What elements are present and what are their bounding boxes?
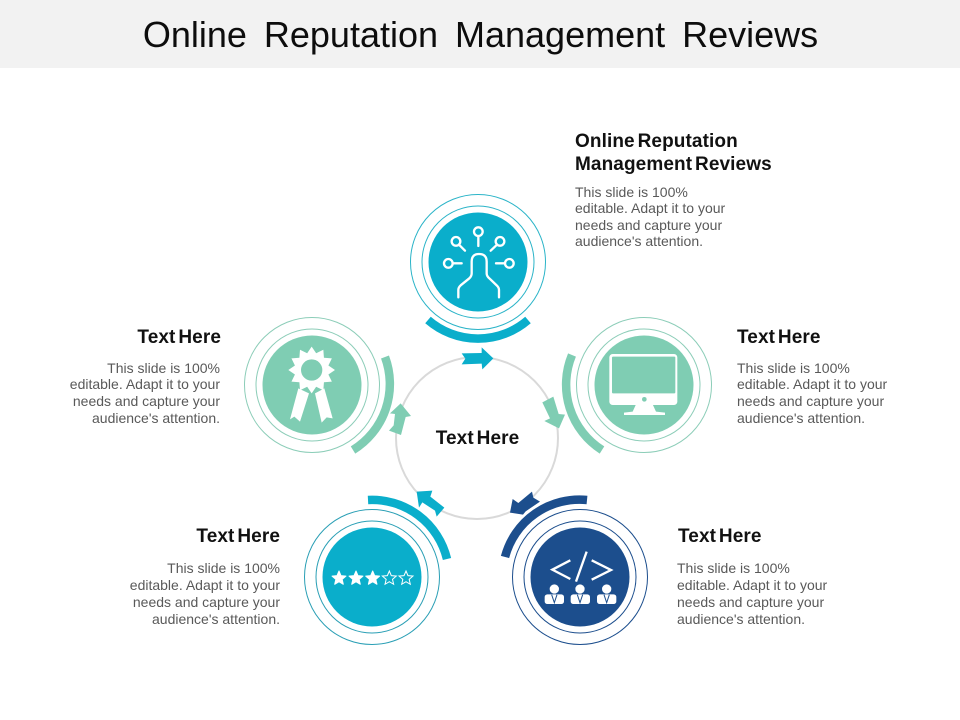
text block: bottom left: editable. Adapt it to your (130, 577, 280, 593)
central label: Text Here (436, 428, 519, 449)
text block: left: editable. Adapt it to your (70, 376, 220, 392)
icon: person with connected nodes (444, 227, 514, 297)
text block: bottom left: audience's attention. (152, 611, 280, 627)
title: Online Reputation Management Reviews (143, 14, 818, 55)
text block: bottom right: Text Here (678, 526, 762, 547)
disc (428, 212, 528, 312)
text block: bottom right: editable. Adapt it to your (677, 577, 828, 593)
rings (244, 318, 380, 452)
arrow: bottom right (510, 492, 540, 515)
node: right (566, 318, 712, 452)
disc (262, 336, 362, 434)
header band (0, 0, 960, 68)
text block: top: editable. Adapt it to your (575, 200, 726, 216)
disc (530, 528, 630, 626)
arrow: left (389, 403, 411, 435)
arc (428, 320, 528, 339)
rings (304, 510, 440, 644)
text block: right: editable. Adapt it to your (737, 376, 888, 392)
text block: right: This slide is 100% (737, 360, 850, 376)
arc (505, 500, 587, 557)
text block: top: needs and capture your (575, 217, 722, 233)
icon: star rating (332, 571, 413, 584)
arc (368, 500, 447, 559)
text block: top: audience's attention. (575, 233, 703, 249)
text block: bottom left: needs and capture your (133, 594, 280, 610)
text block: bottom left: This slide is 100% (167, 560, 280, 576)
arrow: right (542, 397, 565, 428)
text block: top: Online Reputation (575, 131, 738, 152)
text block: right: audience's attention. (737, 410, 865, 426)
arrow: bottom left (417, 491, 444, 517)
text block: top: Management Reviews (575, 154, 772, 175)
rings (410, 194, 546, 330)
node: top (410, 194, 546, 339)
text block: bottom right: This slide is 100% (677, 560, 790, 576)
disc (322, 528, 422, 626)
cycle arrows (389, 347, 565, 517)
central ring (396, 357, 558, 519)
text block: right: needs and capture your (737, 393, 884, 409)
text block: right (737, 327, 888, 426)
rings (512, 510, 648, 644)
text block: bottom right (677, 526, 828, 627)
node: left (244, 318, 390, 452)
icon: desktop monitor (609, 354, 677, 415)
text block: top (575, 131, 772, 249)
arc (566, 355, 602, 450)
icon: code and team (545, 552, 616, 604)
node: bottom left (304, 500, 447, 644)
text block: bottom right: audience's attention. (677, 611, 805, 627)
text block: left (70, 327, 221, 426)
text block: bottom left (130, 526, 280, 627)
arrow: top (462, 347, 493, 369)
text block: right: Text Here (737, 327, 821, 348)
text block: top: This slide is 100% (575, 184, 688, 200)
node: bottom right (505, 500, 648, 644)
icon: award rosette (288, 347, 335, 423)
text block: left: This slide is 100% (107, 360, 220, 376)
text block: left: audience's attention. (92, 410, 220, 426)
text block: bottom right: needs and capture your (677, 594, 824, 610)
text block: left: Text Here (137, 327, 221, 348)
disc (594, 336, 694, 434)
text block: bottom left: Text Here (196, 526, 280, 547)
rings (576, 318, 712, 452)
arc (353, 357, 390, 450)
text block: left: needs and capture your (73, 393, 220, 409)
